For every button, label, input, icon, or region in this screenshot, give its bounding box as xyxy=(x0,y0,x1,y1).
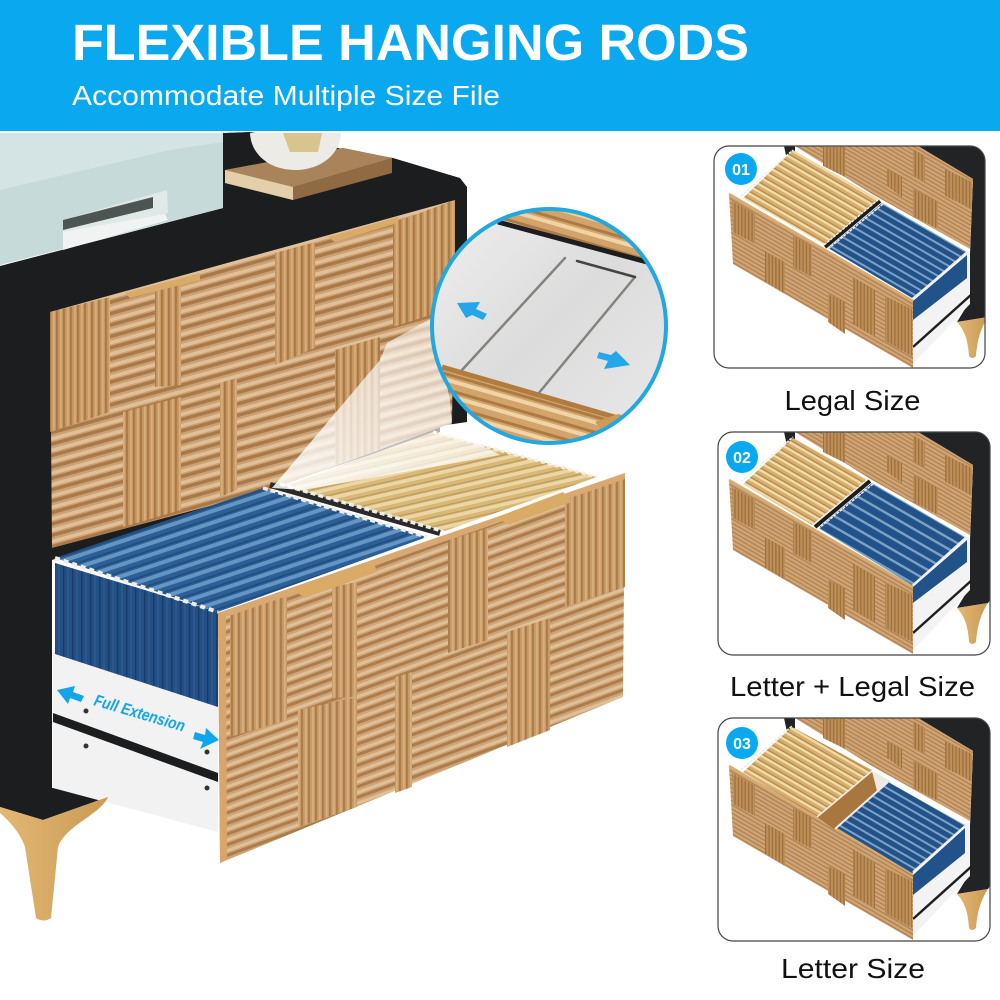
file rails xyxy=(55,432,597,612)
blue legal files xyxy=(55,488,427,612)
cabinet leg xyxy=(0,797,108,920)
badge 03: 03 xyxy=(733,736,751,753)
cabinet main body xyxy=(0,132,467,820)
badge 01 xyxy=(725,153,757,185)
label: letter size: Letter Size xyxy=(781,953,925,984)
full extension arrows xyxy=(57,686,219,749)
badge 02 xyxy=(726,441,758,473)
drawer slide rail xyxy=(53,708,218,790)
book and vase xyxy=(225,133,392,200)
panel 03: letter size xyxy=(718,718,990,941)
light beam to inset xyxy=(272,318,500,490)
rod expand arrows xyxy=(457,302,630,369)
drawer with hanging files xyxy=(53,432,625,863)
tan letter files xyxy=(285,432,597,531)
cabinet wood front xyxy=(50,200,455,548)
full extension label: Full Extension xyxy=(92,692,187,736)
banner title: FLEXIBLE HANGING RODS xyxy=(72,14,749,71)
badge 03 xyxy=(726,727,758,759)
drawer wood front xyxy=(218,473,625,863)
printer xyxy=(0,133,223,265)
label: legal size: Legal Size xyxy=(784,385,920,416)
blue file side xyxy=(55,563,218,707)
badge 01: 01 xyxy=(732,162,750,179)
badge 02: 02 xyxy=(733,450,751,467)
label: letter + legal size: Letter + Legal Size xyxy=(730,671,975,702)
white drawer side xyxy=(53,650,218,832)
panel 01: legal size xyxy=(714,146,990,368)
inset circle: hanging rods xyxy=(430,207,668,445)
rods xyxy=(462,258,635,394)
panel 02: letter + legal size xyxy=(718,432,990,655)
banner subtitle: Accommodate Multiple Size File xyxy=(72,80,500,111)
top banner xyxy=(0,0,1000,131)
